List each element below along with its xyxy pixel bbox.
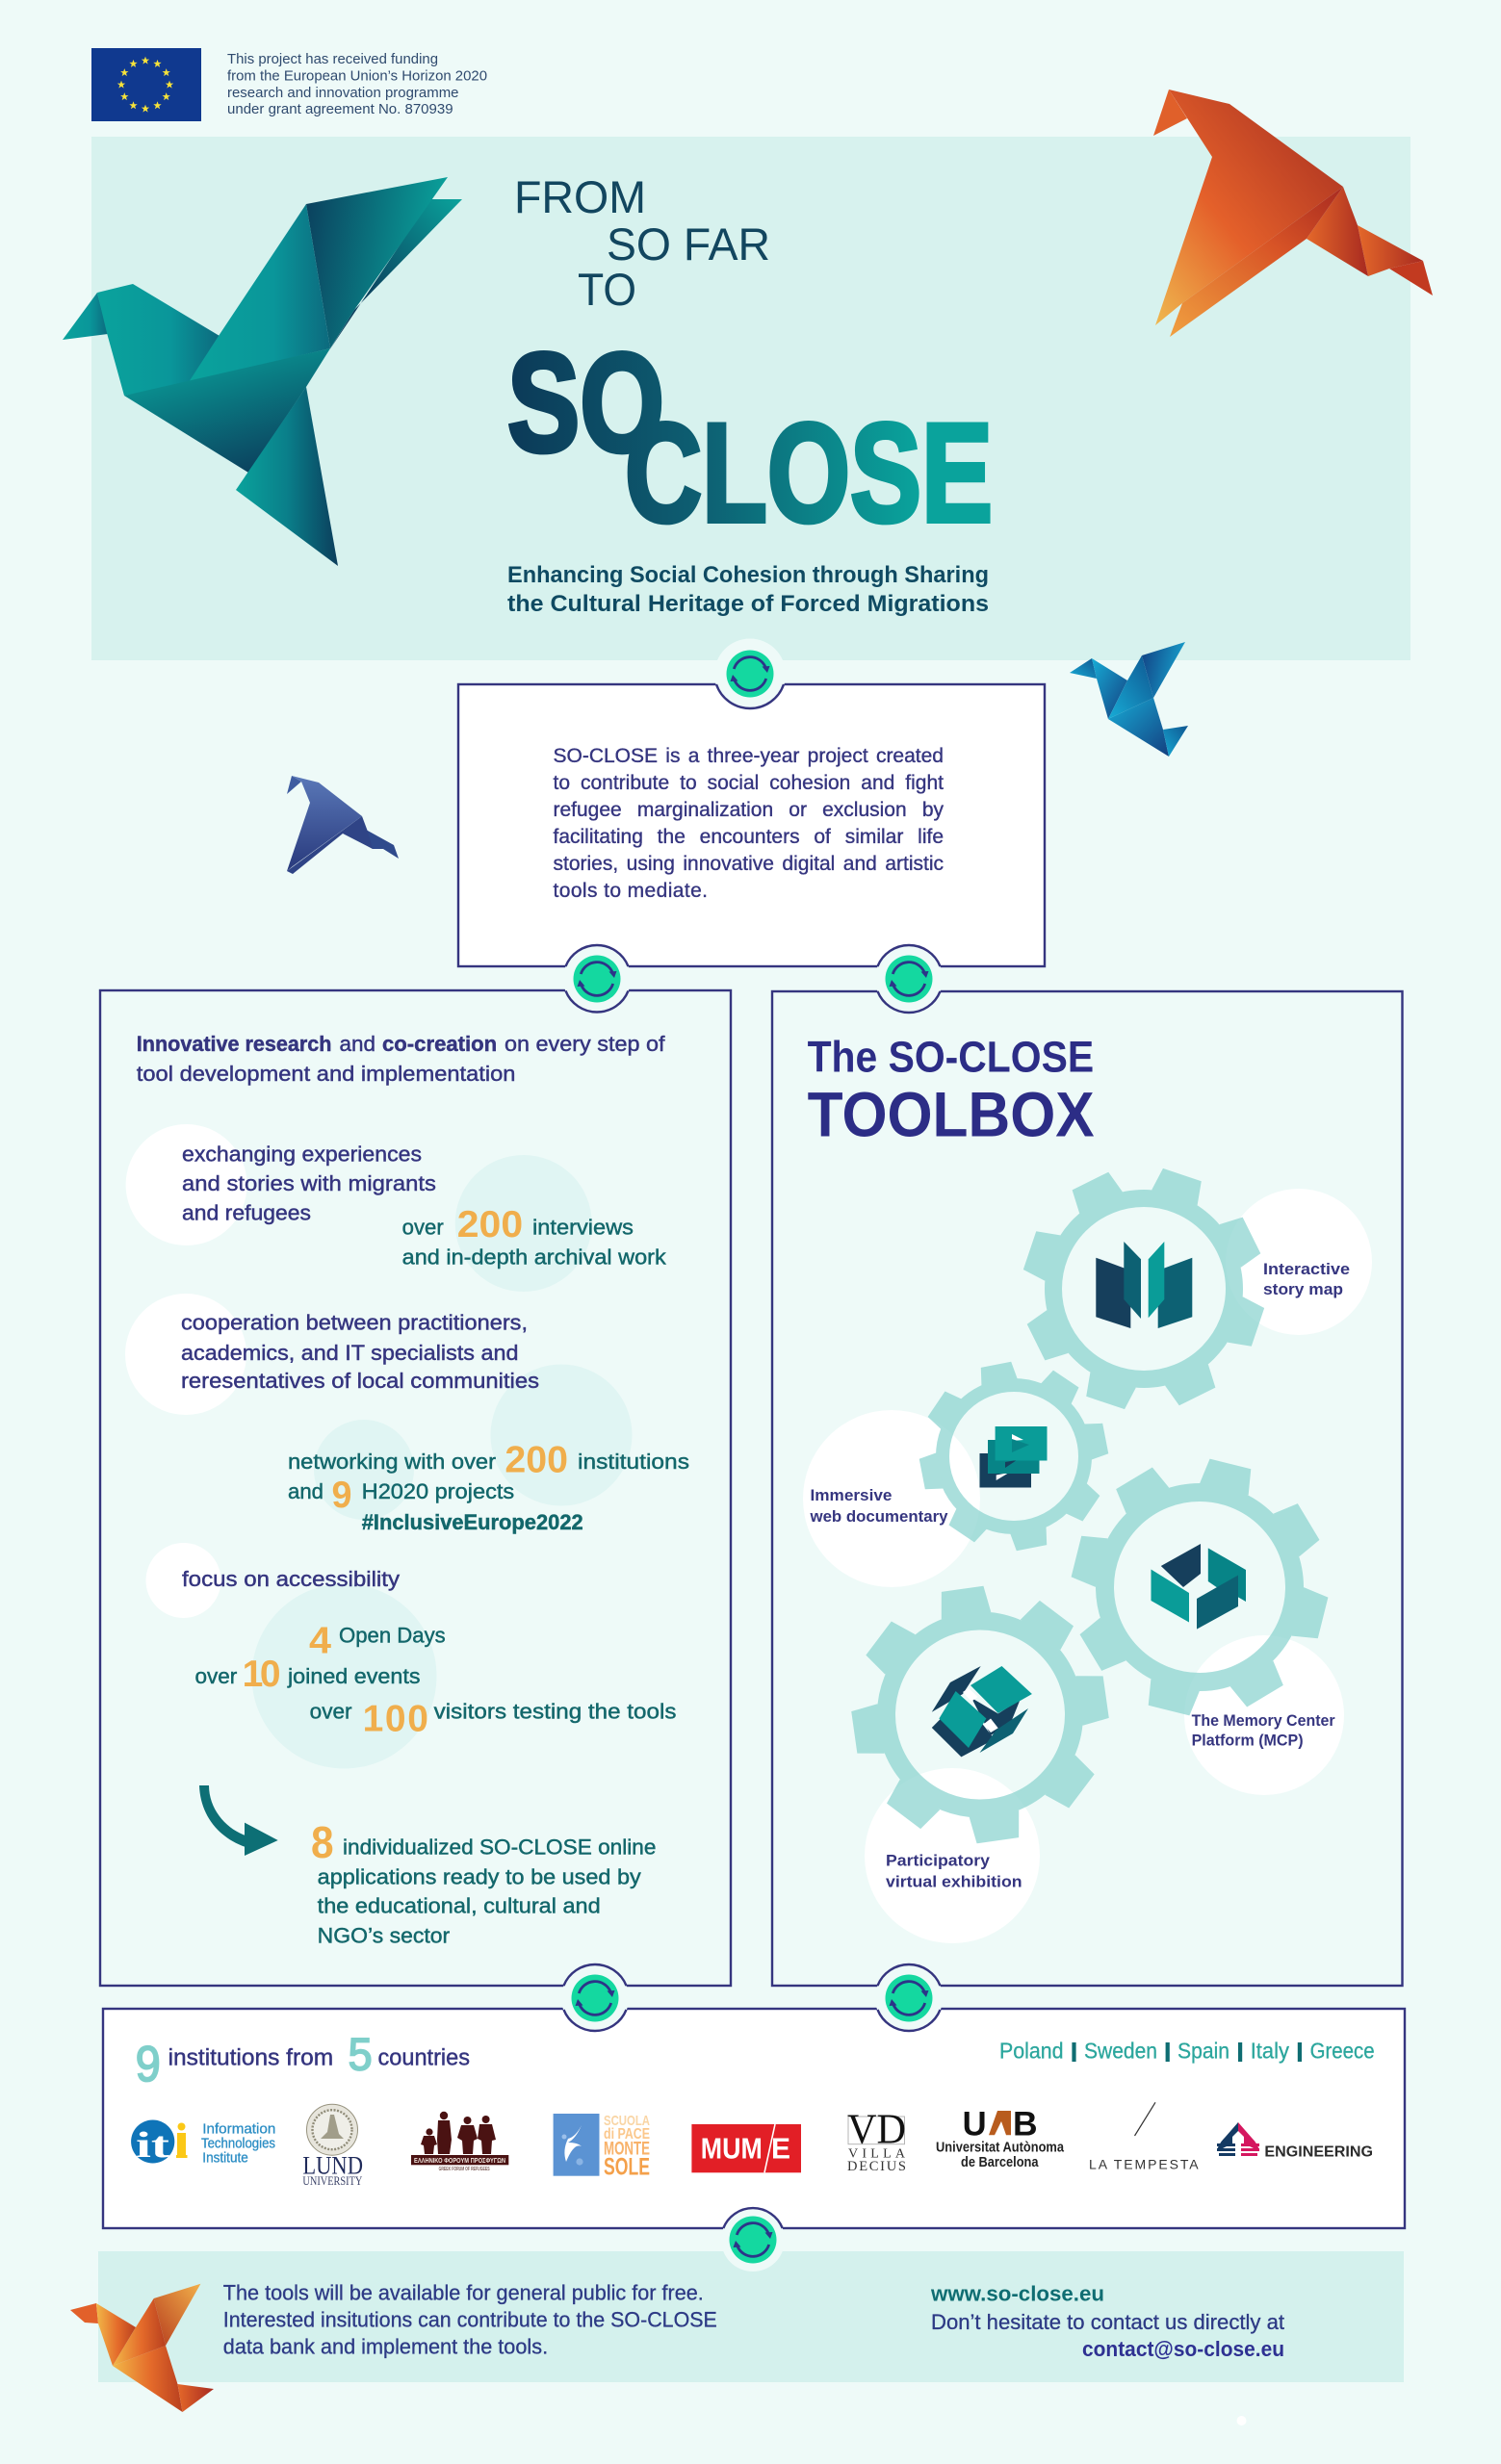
logo: Information Technologies Institute: Institute bbox=[202, 2150, 248, 2167]
label: immersive web documentary: web documentary bbox=[810, 1507, 948, 1526]
heading: innovative research: co-creation bbox=[382, 1032, 497, 1056]
logo: Villa Decius: VILLA bbox=[848, 2147, 906, 2162]
logo: Information Technologies Institute: Technologies bbox=[201, 2136, 275, 2152]
text: focus on accessibility: focus on accessibility bbox=[182, 1567, 400, 1591]
funding statement bbox=[227, 52, 487, 117]
icon: memory center cube bbox=[1152, 1544, 1246, 1630]
decorative circles bbox=[125, 1124, 632, 1769]
funding statement: under grant agreement No. 870939 bbox=[227, 102, 453, 117]
logo: MUM/E: E bbox=[771, 2132, 790, 2166]
icon: open book map bbox=[1096, 1242, 1192, 1328]
stat: 8 applications bbox=[311, 1817, 656, 1948]
heading: the so-close toolbox: TOOLBOX bbox=[808, 1078, 1095, 1149]
stat: 200 interviews: 200 bbox=[457, 1204, 523, 1245]
icon: stacked video frames bbox=[980, 1426, 1048, 1488]
panel: institutions bbox=[103, 2009, 1405, 2228]
icon: blue origami bird bbox=[1070, 642, 1188, 757]
stat: accessibility numbers: 100 bbox=[363, 1698, 428, 1740]
stat: networking: institutions bbox=[578, 1450, 689, 1474]
text: cooperation: academics, and IT specialists and bbox=[181, 1341, 518, 1365]
list: countries: Poland bbox=[999, 2038, 1063, 2063]
logo: UAB: U bbox=[963, 2105, 987, 2143]
label: immersive web documentary bbox=[810, 1486, 948, 1526]
label: participatory virtual exhibition: virtual exhibition bbox=[886, 1873, 1022, 1891]
footer text: availability: Interested insitutions can contribute to the SO-CLOSE bbox=[223, 2308, 717, 2332]
connector: intro to research panel bbox=[563, 945, 631, 1013]
footer text: availability: data bank and implement the tools. bbox=[223, 2335, 548, 2359]
label: interactive story map: story map bbox=[1263, 1280, 1343, 1298]
stat: 200 interviews: over bbox=[402, 1215, 444, 1239]
title: SO CLOSE logotype bbox=[507, 323, 993, 551]
label: participatory virtual exhibition: Participatory bbox=[886, 1852, 991, 1869]
text: project introduction bbox=[553, 745, 944, 902]
list: countries: Greece bbox=[1310, 2038, 1375, 2063]
icon: virtual exhibition cube bbox=[932, 1666, 1032, 1757]
heading: institutions from countries bbox=[136, 2029, 470, 2092]
footer text: contact bbox=[930, 2282, 1284, 2361]
heading: innovative research: and bbox=[339, 1032, 375, 1056]
gear: web documentary bbox=[919, 1361, 1109, 1552]
stat: 8 applications: individualized SO-CLOSE online bbox=[343, 1835, 656, 1860]
text: exchanging experiences: and refugees bbox=[182, 1201, 311, 1225]
title: from so far to: TO bbox=[578, 264, 636, 315]
footer text: contact: contact@so-close.eu bbox=[1082, 2337, 1284, 2361]
icon: teal origami bird bbox=[63, 177, 462, 566]
stat: 200 interviews bbox=[402, 1204, 667, 1270]
logo: Information Technologies Institute bbox=[131, 2119, 275, 2167]
logo: Information Technologies Institute: Information bbox=[202, 2121, 275, 2138]
heading: the so-close toolbox bbox=[808, 1033, 1095, 1149]
stat: accessibility numbers: visitors testing the tools bbox=[434, 1700, 676, 1724]
subtitle: Enhancing Social Cohesion through Sharing bbox=[507, 562, 989, 588]
logo: UAB: de Barcelona bbox=[961, 2154, 1039, 2170]
main title bbox=[507, 171, 993, 617]
heading: the so-close toolbox: The SO-CLOSE bbox=[808, 1033, 1094, 1082]
EU funding block bbox=[91, 48, 487, 121]
label: memory center platform: The Memory Center bbox=[1192, 1711, 1335, 1730]
stat: accessibility numbers: over bbox=[194, 1664, 237, 1688]
stat: 200 interviews: interviews bbox=[532, 1215, 634, 1239]
stat: networking bbox=[288, 1440, 689, 1534]
footer text: contact: Don’t hesitate to contact us directly at bbox=[931, 2310, 1284, 2334]
stat: networking: H2020 projects bbox=[362, 1479, 514, 1503]
panel: header background bbox=[91, 137, 1410, 660]
title: from so far to: SO FAR bbox=[607, 218, 770, 270]
text: project introduction: stories, using innovative digital and artistic bbox=[553, 853, 944, 875]
text: project introduction: refugee marginalization or exclusion by bbox=[553, 799, 944, 821]
icon: small orange origami bird bbox=[70, 2284, 214, 2412]
logo: Lund University: LUND bbox=[302, 2151, 363, 2179]
stat: accessibility numbers: Open Days bbox=[339, 1624, 446, 1648]
stat: networking: 9 bbox=[331, 1475, 352, 1516]
logo: La Tempesta bbox=[1089, 2102, 1199, 2171]
logo: Greek Forum of Refugees: ΕΛΛΗΝΙΚΟ ΦΟΡΟΥΜ ΠΡΟΣΦΥΓΩΝ bbox=[414, 2156, 505, 2165]
stat: networking: #InclusiveEurope2022 bbox=[362, 1510, 583, 1534]
label: immersive web documentary: Immersive bbox=[811, 1486, 892, 1504]
footer text: contact: www.so-close.eu bbox=[930, 2282, 1104, 2306]
panel: toolbox bbox=[772, 991, 1402, 1986]
stat: networking: and bbox=[288, 1479, 323, 1503]
stat: networking: networking with over bbox=[288, 1450, 496, 1474]
logo: Lund University bbox=[302, 2104, 363, 2188]
logo: MUM/E bbox=[691, 2124, 801, 2172]
heading: institutions from countries: 9 bbox=[136, 2037, 161, 2092]
logo: Information Technologies Institute: it bbox=[136, 2125, 170, 2166]
stat: 8 applications: NGO’s sector bbox=[318, 1923, 450, 1948]
logo: UAB: B bbox=[1013, 2105, 1038, 2143]
logo: Scuola di Pace Monte Sole: SOLE bbox=[604, 2154, 650, 2181]
logo: Villa Decius: VD bbox=[847, 2106, 906, 2153]
logo: Scuola di Pace Monte Sole: MONTE bbox=[604, 2139, 650, 2160]
text: cooperation: reresentatives of local communities bbox=[181, 1369, 539, 1393]
gear: memory center platform bbox=[1071, 1458, 1329, 1716]
list: countries: Spain bbox=[1178, 2038, 1229, 2063]
logo: UAB: Universitat Autònoma bbox=[936, 2140, 1065, 2156]
logo: Greek Forum of Refugees bbox=[411, 2112, 508, 2172]
label: memory center platform bbox=[1192, 1711, 1335, 1750]
connector: toolbox panel to institutions bbox=[875, 1964, 943, 2032]
text: project introduction: facilitating the encounters of similar life bbox=[553, 826, 944, 848]
text: project introduction: tools to mediate. bbox=[553, 880, 708, 902]
gear: interactive story map bbox=[1022, 1168, 1265, 1410]
panel: intro box bbox=[458, 684, 1045, 966]
heading: institutions from countries: institutions from bbox=[168, 2045, 333, 2071]
logo: Villa Decius: DECIUS bbox=[847, 2159, 906, 2174]
heading: innovative research: on every step of bbox=[505, 1032, 665, 1056]
stat: accessibility numbers: 10 bbox=[243, 1654, 281, 1695]
funding statement: research and innovation programme bbox=[227, 86, 458, 101]
stat: 8 applications: applications ready to be used by bbox=[318, 1864, 641, 1888]
logo: Lund University: UNIVERSITY bbox=[302, 2174, 362, 2188]
arrow bbox=[199, 1785, 278, 1856]
heading: innovative research: tool development and implementation bbox=[137, 1062, 516, 1086]
text: project introduction: to contribute to social cohesion and fight bbox=[553, 772, 944, 794]
label circles bbox=[803, 1189, 1372, 1943]
label: interactive story map bbox=[1263, 1260, 1350, 1298]
heading: innovative research bbox=[137, 1032, 665, 1086]
stat: accessibility numbers bbox=[194, 1621, 676, 1740]
connector: research panel to institutions bbox=[561, 1964, 629, 2032]
list: countries: Sweden bbox=[1084, 2038, 1157, 2063]
stat: 8 applications: the educational, cultural and bbox=[318, 1894, 601, 1918]
text: exchanging experiences bbox=[182, 1142, 436, 1225]
title: from so far to bbox=[514, 171, 770, 315]
stat: accessibility numbers: joined events bbox=[287, 1664, 420, 1688]
stat: accessibility numbers: over bbox=[310, 1700, 352, 1724]
logo: Scuola di Pace Monte Sole: di PACE bbox=[604, 2126, 650, 2143]
logo: Villa Decius bbox=[847, 2106, 906, 2174]
label: participatory virtual exhibition bbox=[886, 1852, 1022, 1891]
text: exchanging experiences: and stories with migrants bbox=[182, 1171, 436, 1195]
list: countries: Italy bbox=[1251, 2038, 1289, 2063]
funding statement: This project has received funding bbox=[227, 52, 438, 67]
heading: institutions from countries: countries bbox=[377, 2045, 470, 2071]
logo: Scuola di Pace Monte Sole: SCUOLA bbox=[604, 2113, 650, 2129]
list: countries bbox=[999, 2038, 1375, 2063]
panel: footer background bbox=[98, 2251, 1404, 2382]
stat: accessibility numbers: 4 bbox=[309, 1621, 331, 1662]
text: cooperation: cooperation between practitioners, bbox=[181, 1311, 528, 1335]
connector: header to intro bbox=[714, 639, 786, 710]
icon: navy origami bird bbox=[287, 776, 399, 874]
panel: research and co-creation bbox=[100, 990, 731, 1986]
icon: orange origami bird bbox=[1153, 90, 1433, 337]
connector: institutions to footer bbox=[721, 2208, 785, 2272]
label: memory center platform: Platform (MCP) bbox=[1192, 1732, 1304, 1750]
connector: intro to toolbox panel bbox=[875, 945, 943, 1013]
icon: EU flag bbox=[91, 48, 201, 121]
subtitle bbox=[507, 562, 989, 617]
title: SO CLOSE logotype: CLOSE bbox=[625, 395, 993, 551]
logo: Engineering bbox=[1217, 2122, 1373, 2161]
text: project introduction: SO-CLOSE is a three-year project created bbox=[553, 745, 944, 767]
text: exchanging experiences: exchanging experiences bbox=[182, 1142, 422, 1167]
logo: Engineering: ENGINEERING bbox=[1264, 2144, 1373, 2161]
text: cooperation bbox=[181, 1311, 539, 1393]
funding statement: from the European Union’s Horizon 2020 bbox=[227, 69, 487, 85]
footer text: availability bbox=[223, 2280, 717, 2359]
heading: institutions from countries: 5 bbox=[349, 2029, 373, 2080]
stat: networking: 200 bbox=[505, 1440, 568, 1480]
gear: participatory exhibition bbox=[851, 1585, 1109, 1844]
logo: La Tempesta: LA TEMPESTA bbox=[1089, 2156, 1199, 2171]
label: interactive story map: Interactive bbox=[1263, 1260, 1350, 1278]
logo: MUM/E: MUM bbox=[701, 2132, 763, 2166]
stat: 200 interviews: and in-depth archival work bbox=[402, 1245, 667, 1270]
logo: Greek Forum of Refugees: GREEK FORUM OF REFUGEES bbox=[439, 2167, 490, 2172]
title: SO CLOSE logotype: SO bbox=[507, 323, 664, 481]
logo: UAB bbox=[936, 2105, 1065, 2170]
subtitle: the Cultural Heritage of Forced Migrations bbox=[507, 591, 989, 617]
stat: 8 applications: 8 bbox=[311, 1817, 334, 1867]
footer text: availability: The tools will be available for general public for free. bbox=[223, 2280, 704, 2304]
logo: Scuola di Pace Monte Sole bbox=[554, 2113, 650, 2181]
title: from so far to: FROM bbox=[514, 171, 646, 222]
heading: innovative research: Innovative research bbox=[137, 1032, 331, 1056]
